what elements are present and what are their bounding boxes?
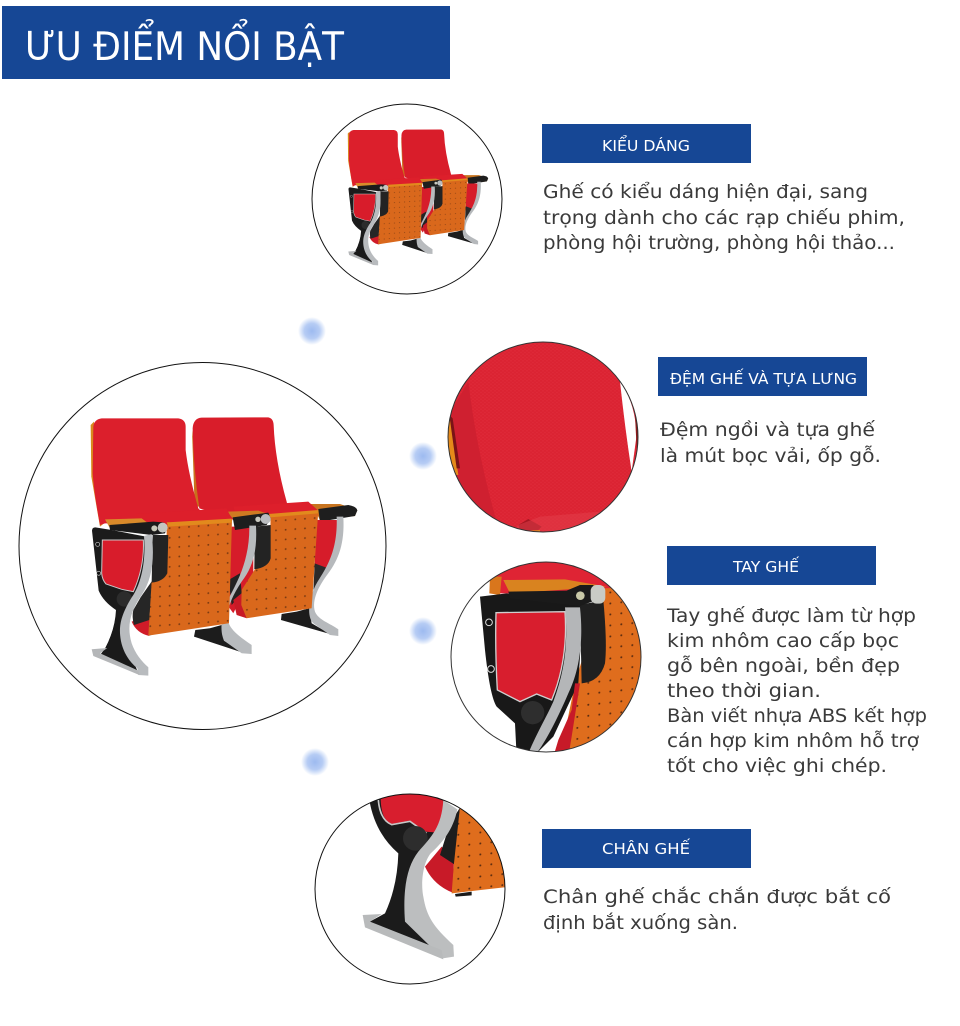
panel: style: KIỂU DÁNG	[602, 134, 690, 155]
decorative connector dot 3	[409, 617, 437, 645]
panel: armrest: theo thời gian.	[667, 680, 821, 702]
panel: armrest: tốt cho việc ghi chép.	[667, 755, 887, 777]
panel: leg: CHÂN GHẾ	[602, 837, 691, 858]
main chair photo circle	[19, 362, 386, 730]
decorative connector dot 2	[409, 442, 437, 470]
panel: armrest: TAY GHẾ	[732, 555, 800, 576]
panel: armrest: Tay ghế được làm từ hợp	[666, 605, 916, 627]
decorative connector dot 1	[298, 317, 326, 345]
panel: armrest: gỗ bên ngoài, bền đẹp	[667, 654, 900, 677]
circle photo: chair leg	[315, 793, 510, 984]
circle photo: armrest	[451, 560, 647, 757]
panel: style: Ghế có kiểu dáng hiện đại, sang	[543, 181, 868, 203]
panel: armrest: kim nhôm cao cấp bọc	[667, 630, 899, 652]
circle photo: chair style	[312, 104, 502, 294]
title banner	[2, 6, 450, 79]
panel: seat and back: Đệm ngồi và tựa ghế	[660, 419, 875, 441]
panel: armrest: cán hợp kim nhôm hỗ trợ	[667, 729, 919, 752]
circle photo: seat fabric	[448, 342, 638, 532]
panel: leg: định bắt xuống sàn.	[543, 911, 738, 934]
panel: leg: Chân ghế chắc chắn được bắt cố	[543, 885, 891, 908]
panel: style	[542, 124, 905, 254]
panel: seat and back: là mút bọc vải, ốp gỗ.	[660, 444, 881, 467]
panel: armrest	[666, 546, 927, 777]
panel: style: trọng dành cho các rạp chiếu phim,	[543, 207, 905, 229]
panel: style: phòng hội trường, phòng hội thảo...	[543, 232, 895, 254]
decorative connector dot 4	[301, 748, 329, 776]
panel: leg	[542, 829, 891, 934]
panel: seat and back	[658, 357, 881, 467]
panel: seat and back: ĐỆM GHẾ VÀ TỰA LƯNG	[670, 367, 857, 388]
title banner: ƯU ĐIỂM NỔI BẬT	[25, 19, 344, 70]
panel: armrest: Bàn viết nhựa ABS kết hợp	[667, 705, 927, 727]
